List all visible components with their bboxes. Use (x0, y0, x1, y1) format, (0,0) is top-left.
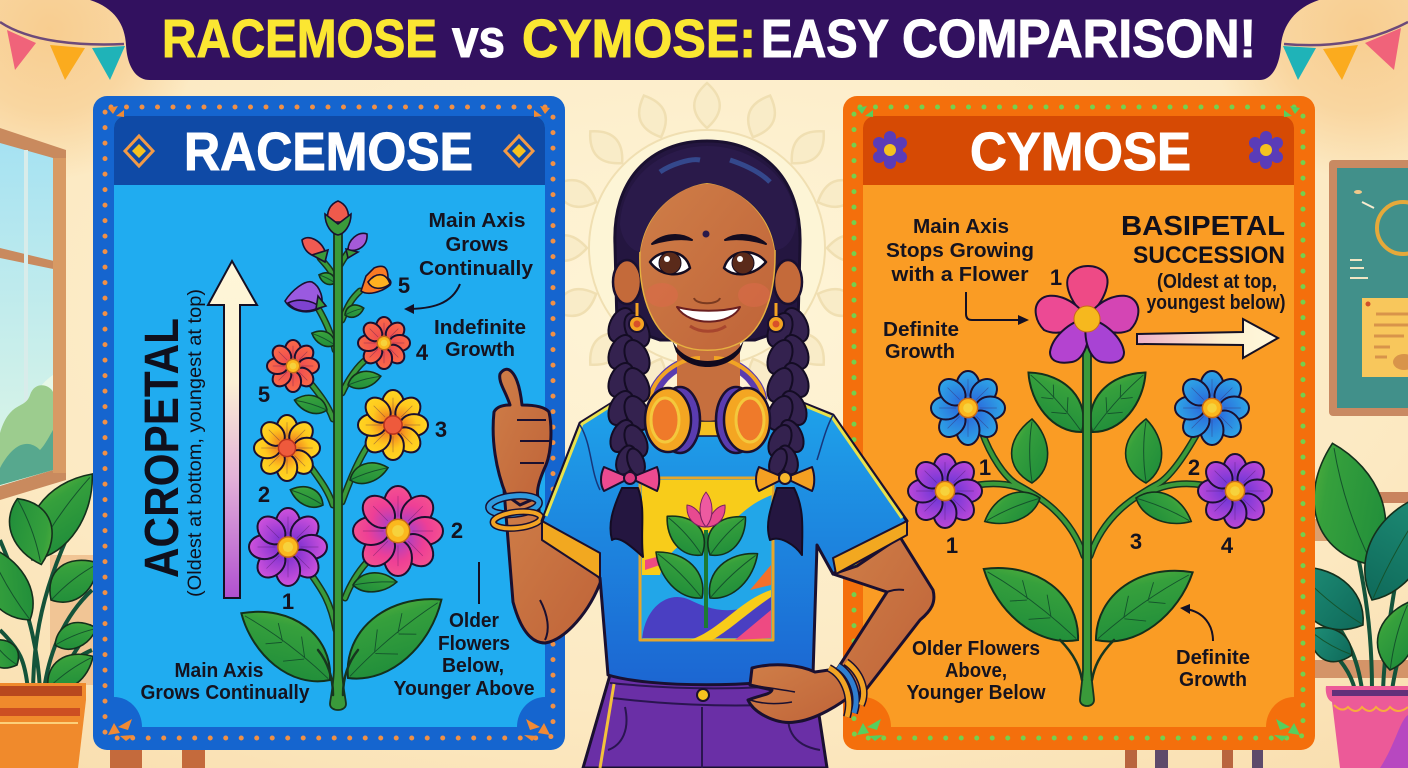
arrow: curved pointer (404, 284, 460, 314)
sequence numbers: 1 (979, 455, 991, 480)
label: main axis grows continually: Continually (419, 258, 534, 280)
label: older flowers above: Older Flowers (912, 638, 1040, 660)
branches (308, 248, 372, 630)
bud: left (302, 238, 328, 262)
side flowers (931, 371, 1005, 445)
label: older flowers above: Above, (945, 660, 1007, 682)
side branches (977, 432, 1203, 556)
title text: EASY (761, 9, 889, 69)
acropetal arrow (208, 261, 257, 598)
label: main axis grows continually (lower): Main Axis (174, 660, 264, 682)
t-shirt (542, 403, 907, 685)
cymose plant (908, 266, 1272, 706)
sequence numbers: 3 (435, 417, 447, 442)
title text: COMPARISON! (902, 9, 1256, 69)
right potted plant (1276, 434, 1408, 768)
sequence numbers (258, 273, 463, 614)
sequence numbers: 5 (258, 382, 270, 407)
tulip: orange (361, 266, 391, 293)
label: main axis stops growing (886, 216, 1034, 286)
eyebrows (652, 235, 766, 244)
character: girl (488, 141, 934, 768)
label: older flowers above: Younger Below (906, 682, 1046, 704)
label: basipetal succession: (Oldest at top, (1157, 271, 1277, 293)
label: definite growth lower: Definite (1176, 647, 1250, 669)
label: definite growth: Growth (885, 341, 955, 363)
hair bows (601, 467, 814, 491)
racemose plant (228, 201, 456, 710)
arrow: elbow pointer (966, 292, 1029, 325)
acropetal subtext: (Oldest at bottom, youngest at top) (185, 289, 206, 597)
back rails (50, 492, 1408, 768)
header flower left (873, 131, 907, 169)
header flower right (1249, 131, 1283, 169)
panel heading: racemose: RACEMOSE (184, 122, 473, 182)
neck (677, 340, 740, 421)
label: main axis stops growing: Stops Growing (886, 240, 1034, 262)
bud: top (325, 201, 351, 235)
label: basipetal succession: SUCCESSION (1133, 242, 1285, 269)
label: main axis grows continually (lower) (140, 660, 310, 704)
headphone cups (645, 387, 770, 453)
label: definite growth lower (1176, 647, 1250, 691)
flowers (249, 508, 327, 586)
label: main axis grows continually (lower): Grows Continually (140, 682, 310, 704)
label: older flowers below (394, 610, 534, 700)
header diamond left (125, 136, 153, 166)
sequence numbers: 5 (398, 273, 410, 298)
bunting right (1283, 22, 1408, 80)
right arm and hand on hip (833, 537, 934, 696)
headphones band (650, 358, 764, 400)
label: definite growth: Definite (883, 319, 959, 341)
small leaves (979, 419, 1197, 532)
left potted plant (0, 459, 108, 768)
panel: cymose (843, 96, 1315, 750)
sequence numbers: 1 (946, 533, 958, 558)
sequence numbers: 3 (1130, 529, 1142, 554)
label: main axis grows continually: Main Axis (428, 210, 526, 232)
label: main axis grows continually (419, 210, 534, 280)
basipetal arrow (1137, 319, 1278, 358)
sequence numbers: 1 (1050, 265, 1062, 290)
sequence numbers (946, 265, 1234, 558)
label: older flowers below: Younger Above (394, 678, 534, 700)
corner sprigs (857, 106, 1300, 741)
side leaves (287, 269, 397, 593)
main stem (318, 225, 358, 710)
pointer line (478, 562, 480, 604)
arrow: curved pointer (1180, 604, 1213, 641)
label: basipetal succession (1121, 210, 1286, 314)
corner sprigs (108, 106, 550, 741)
headphones neck band (652, 362, 762, 400)
title banner (90, 0, 1319, 80)
shirt collar (670, 421, 726, 436)
main stem (1060, 345, 1114, 706)
sequence numbers: 2 (451, 518, 463, 543)
label: main axis stops growing: with a Flower (890, 264, 1029, 286)
t-shirt plant graphic (640, 478, 773, 640)
sequence numbers: 4 (1221, 533, 1234, 558)
trousers (583, 675, 827, 768)
large lower leaves (971, 547, 1095, 657)
bunting left (0, 22, 125, 80)
chin shadow (672, 340, 744, 367)
panel heading: cymose: CYMOSE (970, 122, 1191, 182)
front hair (620, 146, 796, 252)
label: older flowers below: Flowers (438, 633, 510, 655)
bindi (702, 230, 710, 238)
label: basipetal succession: youngest below) (1146, 292, 1286, 314)
right braid (762, 304, 814, 555)
title text (162, 9, 1256, 69)
label: main axis grows continually: Grows (446, 234, 508, 256)
header diamond right (505, 136, 533, 166)
hair back (615, 141, 800, 340)
label: older flowers below: Below, (442, 655, 504, 677)
panel: racemose (93, 96, 565, 750)
title text: RACEMOSE (162, 9, 437, 69)
cheeks (646, 283, 770, 307)
label: definite growth lower: Growth (1179, 669, 1247, 691)
mouth (677, 307, 740, 331)
acropetal label: ACROPETAL (136, 318, 189, 578)
label: indefinite growth (434, 317, 526, 361)
label: older flowers below: Older (449, 610, 499, 632)
label: definite growth (883, 319, 959, 363)
left arm and thumbs-up hand (488, 369, 602, 643)
sequence numbers: 2 (258, 482, 270, 507)
sequence numbers: 1 (282, 589, 294, 614)
eyes (650, 252, 766, 274)
ears and earrings (613, 260, 802, 332)
title text: vs (452, 9, 505, 69)
base leaves (228, 591, 347, 697)
mandala halo (542, 83, 872, 413)
sleeve trims (542, 521, 600, 578)
bud: right (346, 233, 367, 258)
label: older flowers above (906, 638, 1046, 704)
top flower (1036, 266, 1138, 363)
sequence numbers: 2 (1188, 455, 1200, 480)
title text: CYMOSE: (522, 9, 756, 69)
bracelets (829, 662, 864, 717)
left braid (603, 304, 655, 557)
label: main axis stops growing: Main Axis (913, 216, 1009, 238)
label: indefinite growth: Growth (445, 339, 515, 361)
nose (694, 298, 720, 303)
label: indefinite growth: Indefinite (434, 317, 526, 339)
sequence numbers: 4 (416, 340, 429, 365)
window (0, 128, 66, 500)
upper leaves (1017, 359, 1097, 442)
face (640, 183, 775, 350)
bracelets (488, 493, 542, 530)
tulip: purple (285, 282, 326, 312)
label: basipetal succession: BASIPETAL (1121, 210, 1285, 241)
chalkboard (1329, 160, 1408, 416)
hand on hip (748, 662, 864, 723)
